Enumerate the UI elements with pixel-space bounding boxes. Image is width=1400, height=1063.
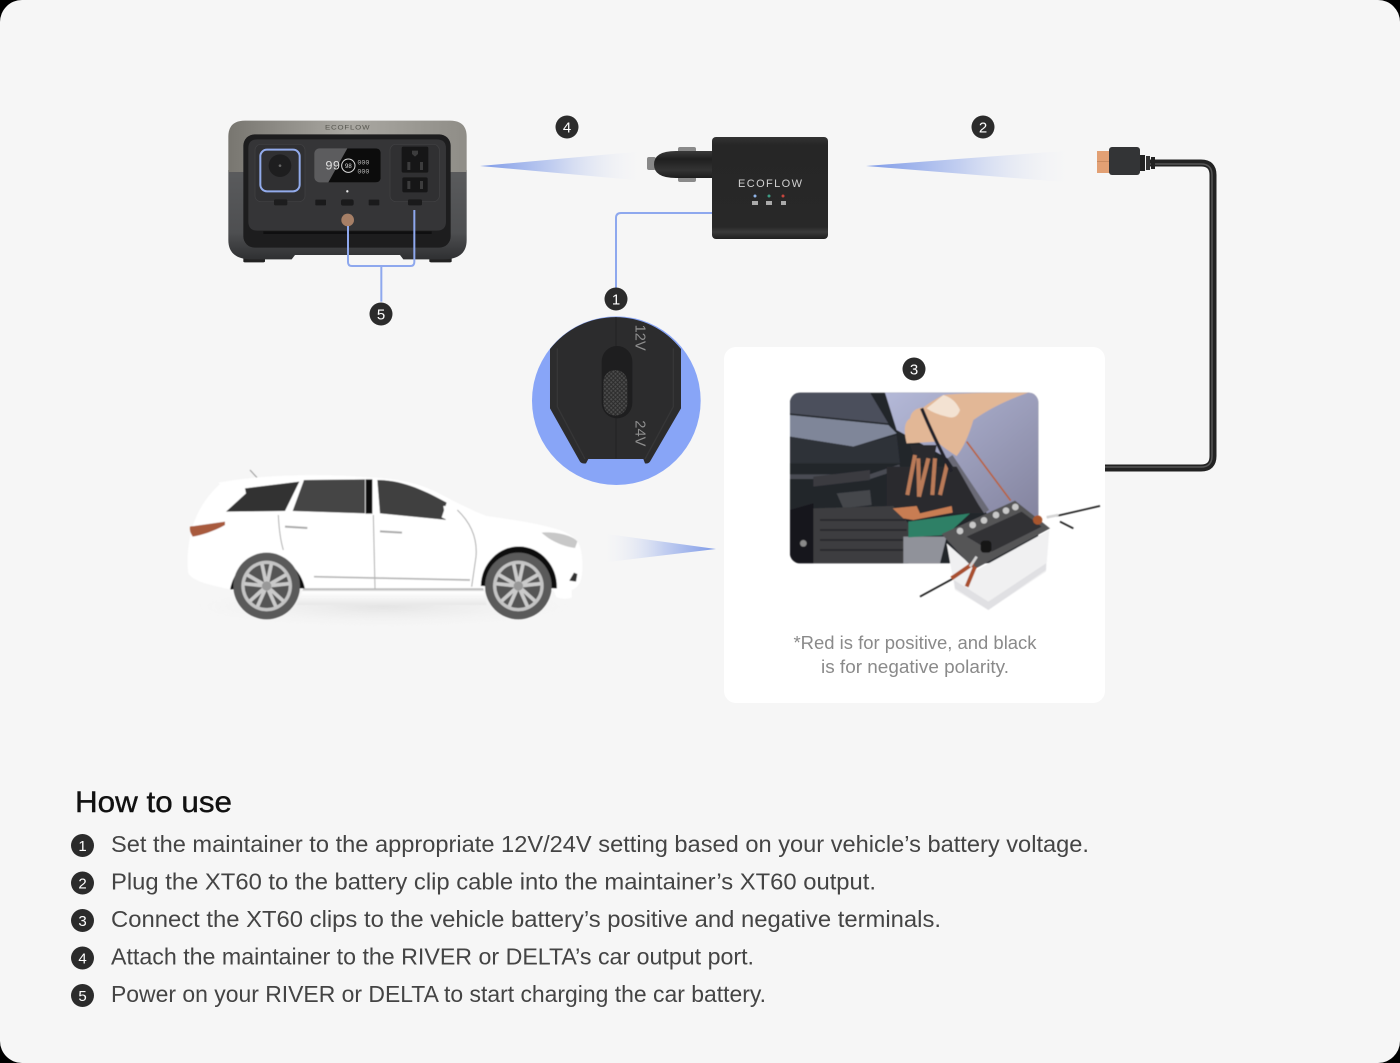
label 12V: 12V (631, 325, 647, 351)
connector arrow: maintainer to cable (866, 150, 1076, 183)
battery base (954, 563, 1046, 610)
step 4: 4 (78, 950, 87, 968)
left port bay (255, 144, 305, 202)
battery body (947, 530, 1049, 610)
cable with XT60 connector (1097, 147, 1213, 468)
ground shadow (170, 583, 597, 630)
engine bay photo (790, 393, 1038, 563)
hand highlight (927, 395, 960, 417)
sill (297, 588, 487, 605)
display: 000 (357, 159, 369, 167)
headlight (542, 532, 577, 548)
slider knob (603, 370, 627, 416)
step badge 4: 4 (563, 120, 571, 136)
front window (377, 480, 447, 520)
step badge 1: 1 (612, 292, 620, 308)
car (170, 470, 597, 630)
panel: battery card (724, 347, 1105, 703)
vents (263, 231, 432, 234)
step badge 2: 2 (979, 120, 987, 136)
label 24V: 24V (631, 420, 647, 447)
battery raised cover (967, 512, 1042, 552)
step 2: 2 (78, 876, 87, 892)
brand on top: ECOFLOW (325, 124, 370, 131)
door lines and handles (278, 510, 476, 588)
tail light (190, 522, 225, 537)
wheel arches (231, 547, 556, 589)
status led (346, 190, 348, 192)
connector arrow: car to battery card (600, 533, 716, 563)
power station feet (243, 257, 452, 262)
step badge 3 (902, 358, 926, 380)
blue circle (532, 316, 701, 485)
negative terminal (981, 541, 991, 553)
step badge 4 (556, 116, 578, 138)
positive terminal (1033, 515, 1042, 525)
step 1: 1 (78, 838, 87, 855)
step 3: 3 (78, 913, 87, 930)
red clip (952, 563, 975, 587)
fog light (569, 573, 577, 582)
step badge 5 (370, 302, 392, 326)
power station (228, 121, 467, 302)
maintainer brand: ECOFLOW (738, 178, 803, 190)
middle window (293, 479, 365, 513)
step 5: Power on your RIVER or DELTA to start charging the car battery. (111, 981, 766, 1007)
step 1: Set the maintainer to the appropriate 12V/24V setting based on your vehicle’s battery voltage. (111, 831, 1089, 857)
switch detail (532, 316, 701, 485)
maintainer indicators (752, 194, 786, 205)
pillar (366, 479, 372, 514)
power station upper body (228, 121, 467, 172)
steps list (71, 831, 1089, 1007)
note text (794, 633, 1038, 677)
step 5: 5 (78, 988, 87, 1005)
car body (188, 475, 582, 599)
display (314, 148, 381, 182)
maintainer device (647, 137, 828, 239)
heading: How to use (75, 786, 232, 819)
rear window (226, 482, 299, 512)
maintainer body (712, 137, 828, 239)
callout line: step 1 (616, 213, 712, 288)
step badge 3: 3 (910, 362, 918, 378)
car output port (260, 150, 300, 205)
slider track (602, 346, 632, 418)
note text: is for negative polarity. (821, 657, 1009, 677)
step badge 2 (972, 116, 994, 138)
note text: *Red is for positive, and black (794, 633, 1038, 653)
battery photo (790, 393, 1100, 610)
step badge 1 (604, 288, 628, 310)
step 4: Attach the maintainer to the RIVER or DELTA’s car output port. (111, 944, 754, 970)
antenna (250, 470, 257, 478)
rear wheel (233, 553, 300, 619)
loose clip wires (920, 506, 1100, 597)
black cable (922, 408, 952, 472)
power station lower body (228, 170, 467, 259)
USB ports (315, 199, 422, 206)
display: 000 (357, 167, 369, 175)
front wheel (485, 553, 552, 619)
display: 99 (325, 158, 340, 173)
right outlet bay (390, 144, 439, 202)
power button (341, 214, 354, 226)
battery lid (942, 501, 1050, 569)
orange cable (967, 442, 1011, 501)
center seam (615, 317, 617, 458)
mirror (443, 506, 467, 521)
housing edge (557, 348, 673, 459)
front panel frame (243, 134, 451, 248)
metal clamp (970, 515, 1058, 567)
connector arrow: station to maintainer (480, 151, 646, 181)
switch housing (550, 317, 681, 463)
step 5 bracket (348, 210, 414, 302)
battery caps (957, 504, 1019, 534)
car plug (647, 147, 712, 182)
step 3: Connect the XT60 clips to the vehicle battery’s positive and negative terminals. (111, 906, 941, 932)
front panel face (248, 139, 446, 231)
clamps (907, 445, 947, 497)
display: 98 (345, 164, 352, 170)
step badge 5: 5 (377, 306, 385, 324)
hand and arm (905, 393, 1028, 456)
step 2: Plug the XT60 to the battery clip cable into the maintainer’s XT60 output. (111, 868, 876, 894)
